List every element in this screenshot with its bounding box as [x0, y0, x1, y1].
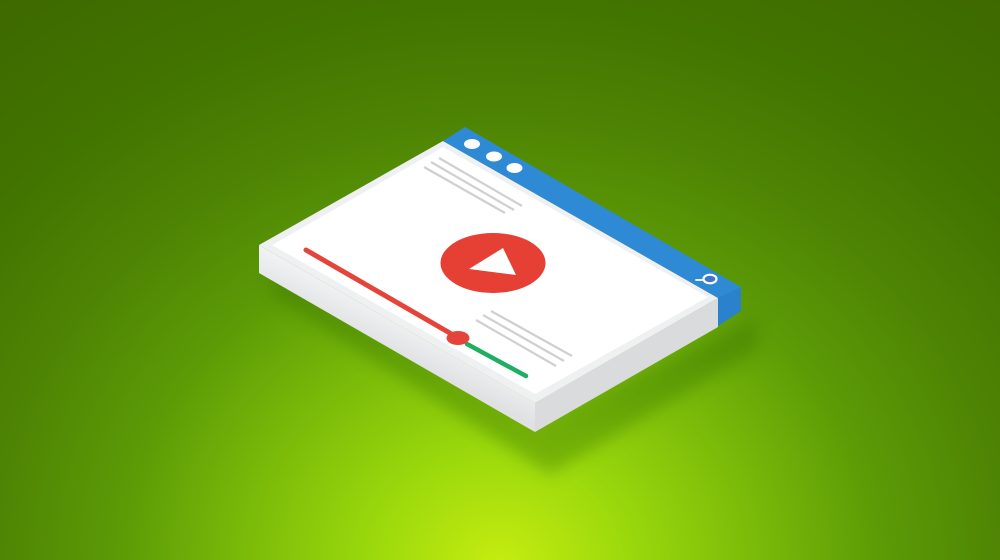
front side face: [535, 298, 718, 432]
icon: search: [696, 275, 716, 283]
progress bar: remaining: [467, 344, 526, 376]
drop shadow: [270, 270, 757, 474]
title bar: [443, 127, 741, 298]
window dots: [464, 139, 522, 173]
top face frame: [259, 141, 718, 403]
progress handle: [446, 331, 470, 345]
window slab: [259, 127, 741, 432]
blue end side face: [718, 287, 741, 326]
play button: [440, 233, 546, 293]
progress bar: played: [306, 250, 455, 336]
left side face: [259, 245, 535, 432]
text lines: top: [424, 158, 522, 213]
text lines: bottom: [476, 311, 572, 366]
icon: play triangle: [469, 248, 516, 275]
screen: [272, 147, 708, 394]
